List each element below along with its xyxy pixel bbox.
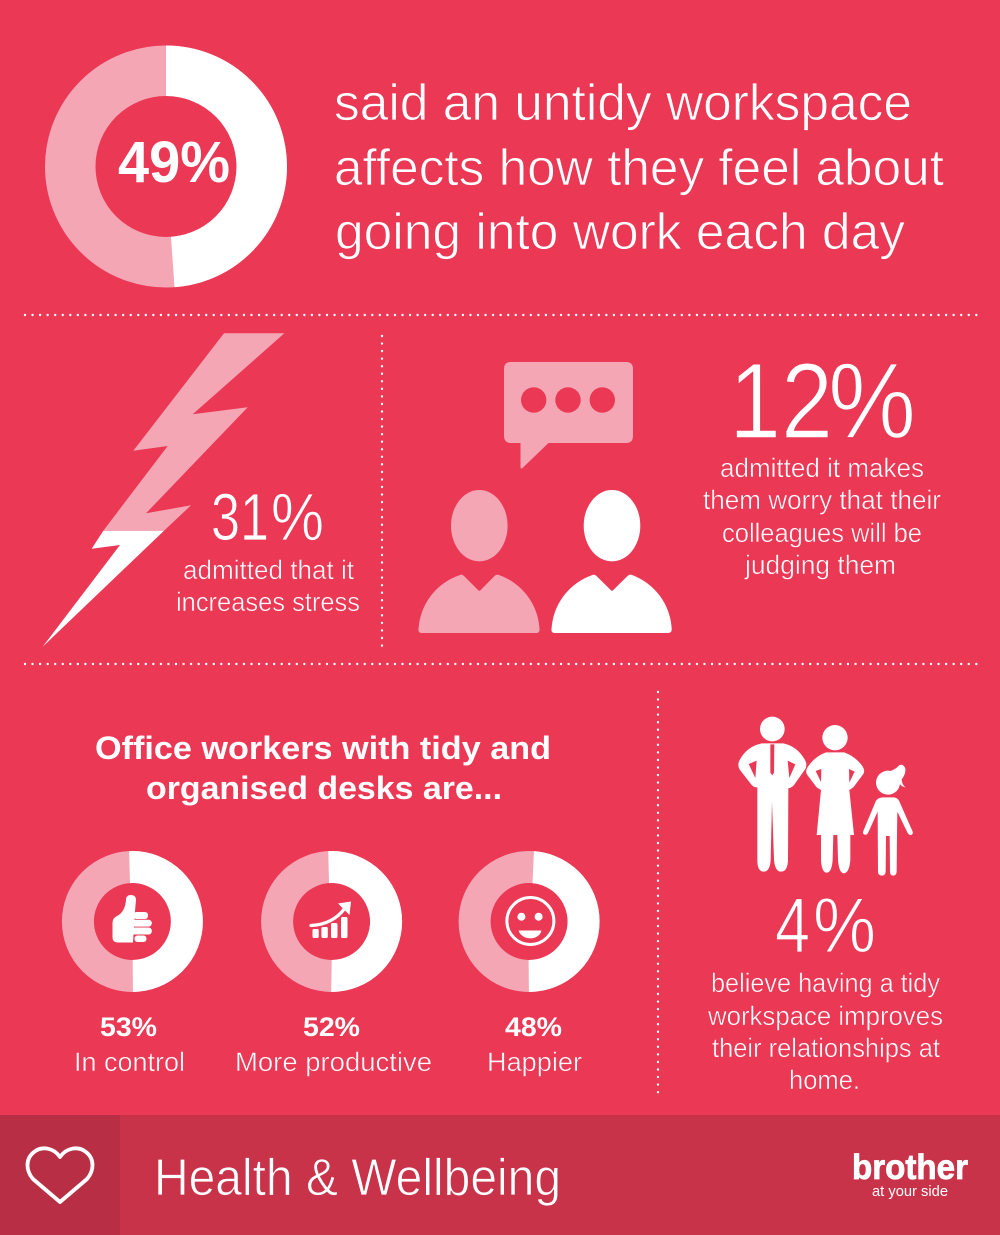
heading: tidy desks: Office workers with tidy and [95,730,551,766]
stat: 31% stress [176,480,360,617]
icon: speech bubble [504,362,633,469]
dotted dividers [25,315,980,1095]
donut value: 49% [118,130,230,195]
donut labels: Happier [487,1047,582,1077]
donut: more productive [277,867,386,976]
stat: 31% stress: 31 [211,480,269,555]
stat: 12% colleagues [703,340,941,580]
stat: 4% relationships: 4 [775,881,810,969]
stat: 4% relationships: workspace improves [707,1001,943,1031]
icon: family [738,717,913,876]
donut labels: 52% [303,1012,360,1042]
stat: 4% relationships [707,881,943,1095]
stat: 12% colleagues: them worry that their [703,485,941,515]
stat: 31% stress: % [271,480,324,555]
headline text [334,74,944,260]
headline text: said an untidy workspace [334,74,912,131]
donut labels: More productive [235,1047,432,1077]
stat: 31% stress: admitted that it [183,555,354,585]
footer title: Health & Wellbeing [154,1149,561,1207]
stat: 4% relationships: home. [789,1065,860,1095]
logo: brother: brother [852,1148,968,1187]
donut chart: 49% [70,71,262,262]
stat: 12% colleagues: admitted it makes [720,453,924,483]
icon: heart [28,1148,92,1202]
donut: happier [475,867,584,976]
donut labels: In control [74,1047,185,1077]
stat: 4% relationships: their relationships at [712,1033,940,1063]
donut labels [74,1012,582,1077]
donut labels: 53% [100,1012,157,1042]
stat: 12% colleagues: judging them [744,550,896,580]
icon: two colleagues [418,490,672,633]
icon: lightning bolt 31% [43,333,284,647]
stat: 12% colleagues: 12 [729,340,833,461]
stat: 31% stress: increases stress [176,587,360,617]
donut labels: 48% [505,1012,562,1042]
icon: smiley [507,898,554,944]
heading: tidy desks: organised desks are... [146,770,502,806]
heading: tidy desks [95,730,551,806]
stat: 12% colleagues: colleagues will be [722,518,922,548]
headline text: going into work each day [335,203,906,260]
donut: in control [78,867,187,976]
stat: 12% colleagues: % [828,340,916,461]
logo: brother: at your side [872,1183,948,1200]
icon: thumbs up [112,895,152,942]
stat: 4% relationships: believe having a tidy [711,968,940,998]
footer band [0,1115,1000,1235]
icon: growth chart [311,902,351,938]
stat: 4% relationships: % [813,881,876,969]
headline text: affects how they feel about [334,139,944,196]
